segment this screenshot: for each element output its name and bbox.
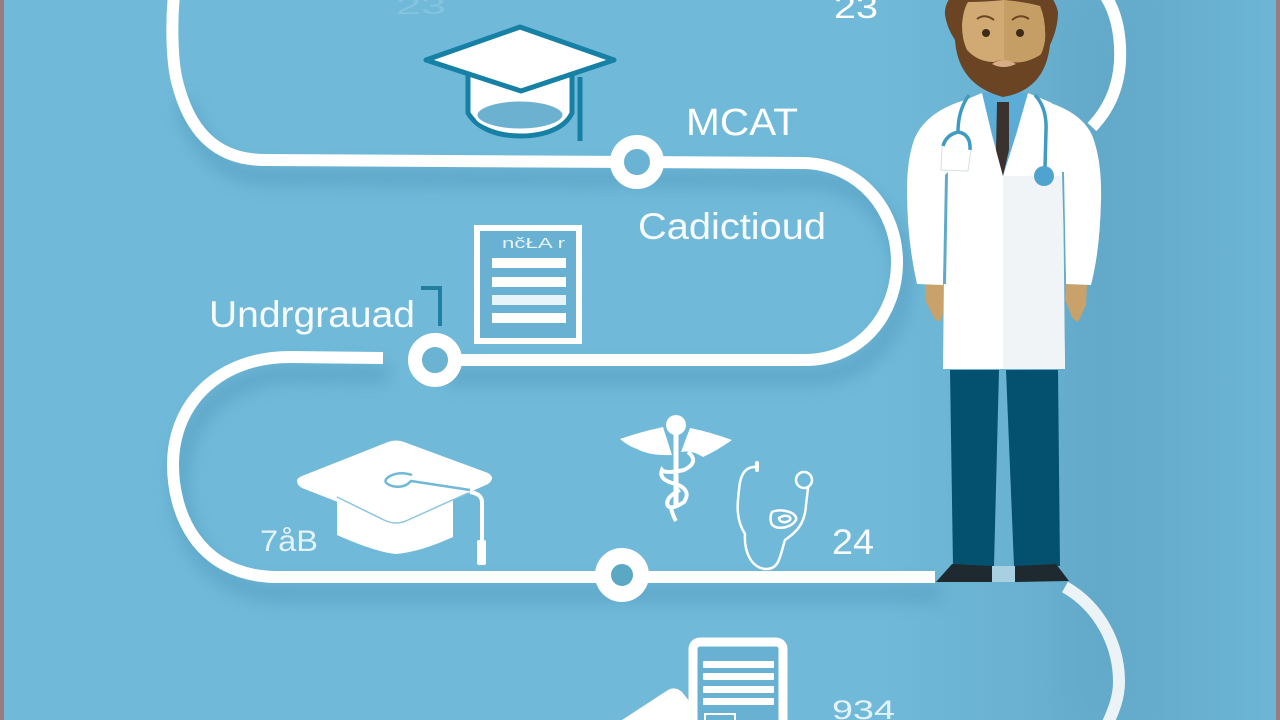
icon: stethoscope	[738, 463, 812, 569]
label: MCAT: MCAT	[686, 102, 798, 144]
trousers	[950, 370, 1060, 566]
white coat body	[943, 93, 1065, 369]
icon: solid graduation cap	[297, 440, 492, 565]
neck and shirt	[982, 93, 1028, 176]
coat sleeves	[907, 100, 1101, 285]
road segment between the shoes	[992, 566, 1016, 582]
arm gaps	[943, 172, 948, 284]
hands	[925, 282, 1087, 322]
winding road path	[172, 0, 1120, 720]
label: 7&amp;B: 7åB	[260, 525, 318, 558]
document heading text: nčŁA r	[502, 235, 565, 252]
shoes	[936, 564, 1069, 582]
stethoscope on coat	[943, 95, 1046, 168]
icon: document with heading	[477, 228, 579, 341]
milestone node: MCAT	[617, 142, 657, 182]
label: 24: 24	[832, 523, 874, 562]
icon: bottom document with pen	[622, 642, 783, 720]
tie	[996, 102, 1009, 176]
head	[945, 0, 1058, 97]
icon: outlined graduation cap	[426, 27, 614, 141]
label: Undrgrauad: Undrgrauad	[209, 294, 415, 335]
milestone node: lower road	[603, 556, 641, 594]
milestone node: undergraduate	[415, 340, 455, 380]
label: Cadictioud: Cadictioud	[638, 206, 826, 247]
icon: caduceus	[620, 415, 732, 521]
doctor figure	[907, 0, 1101, 582]
icon: small bracket mark	[421, 288, 440, 326]
